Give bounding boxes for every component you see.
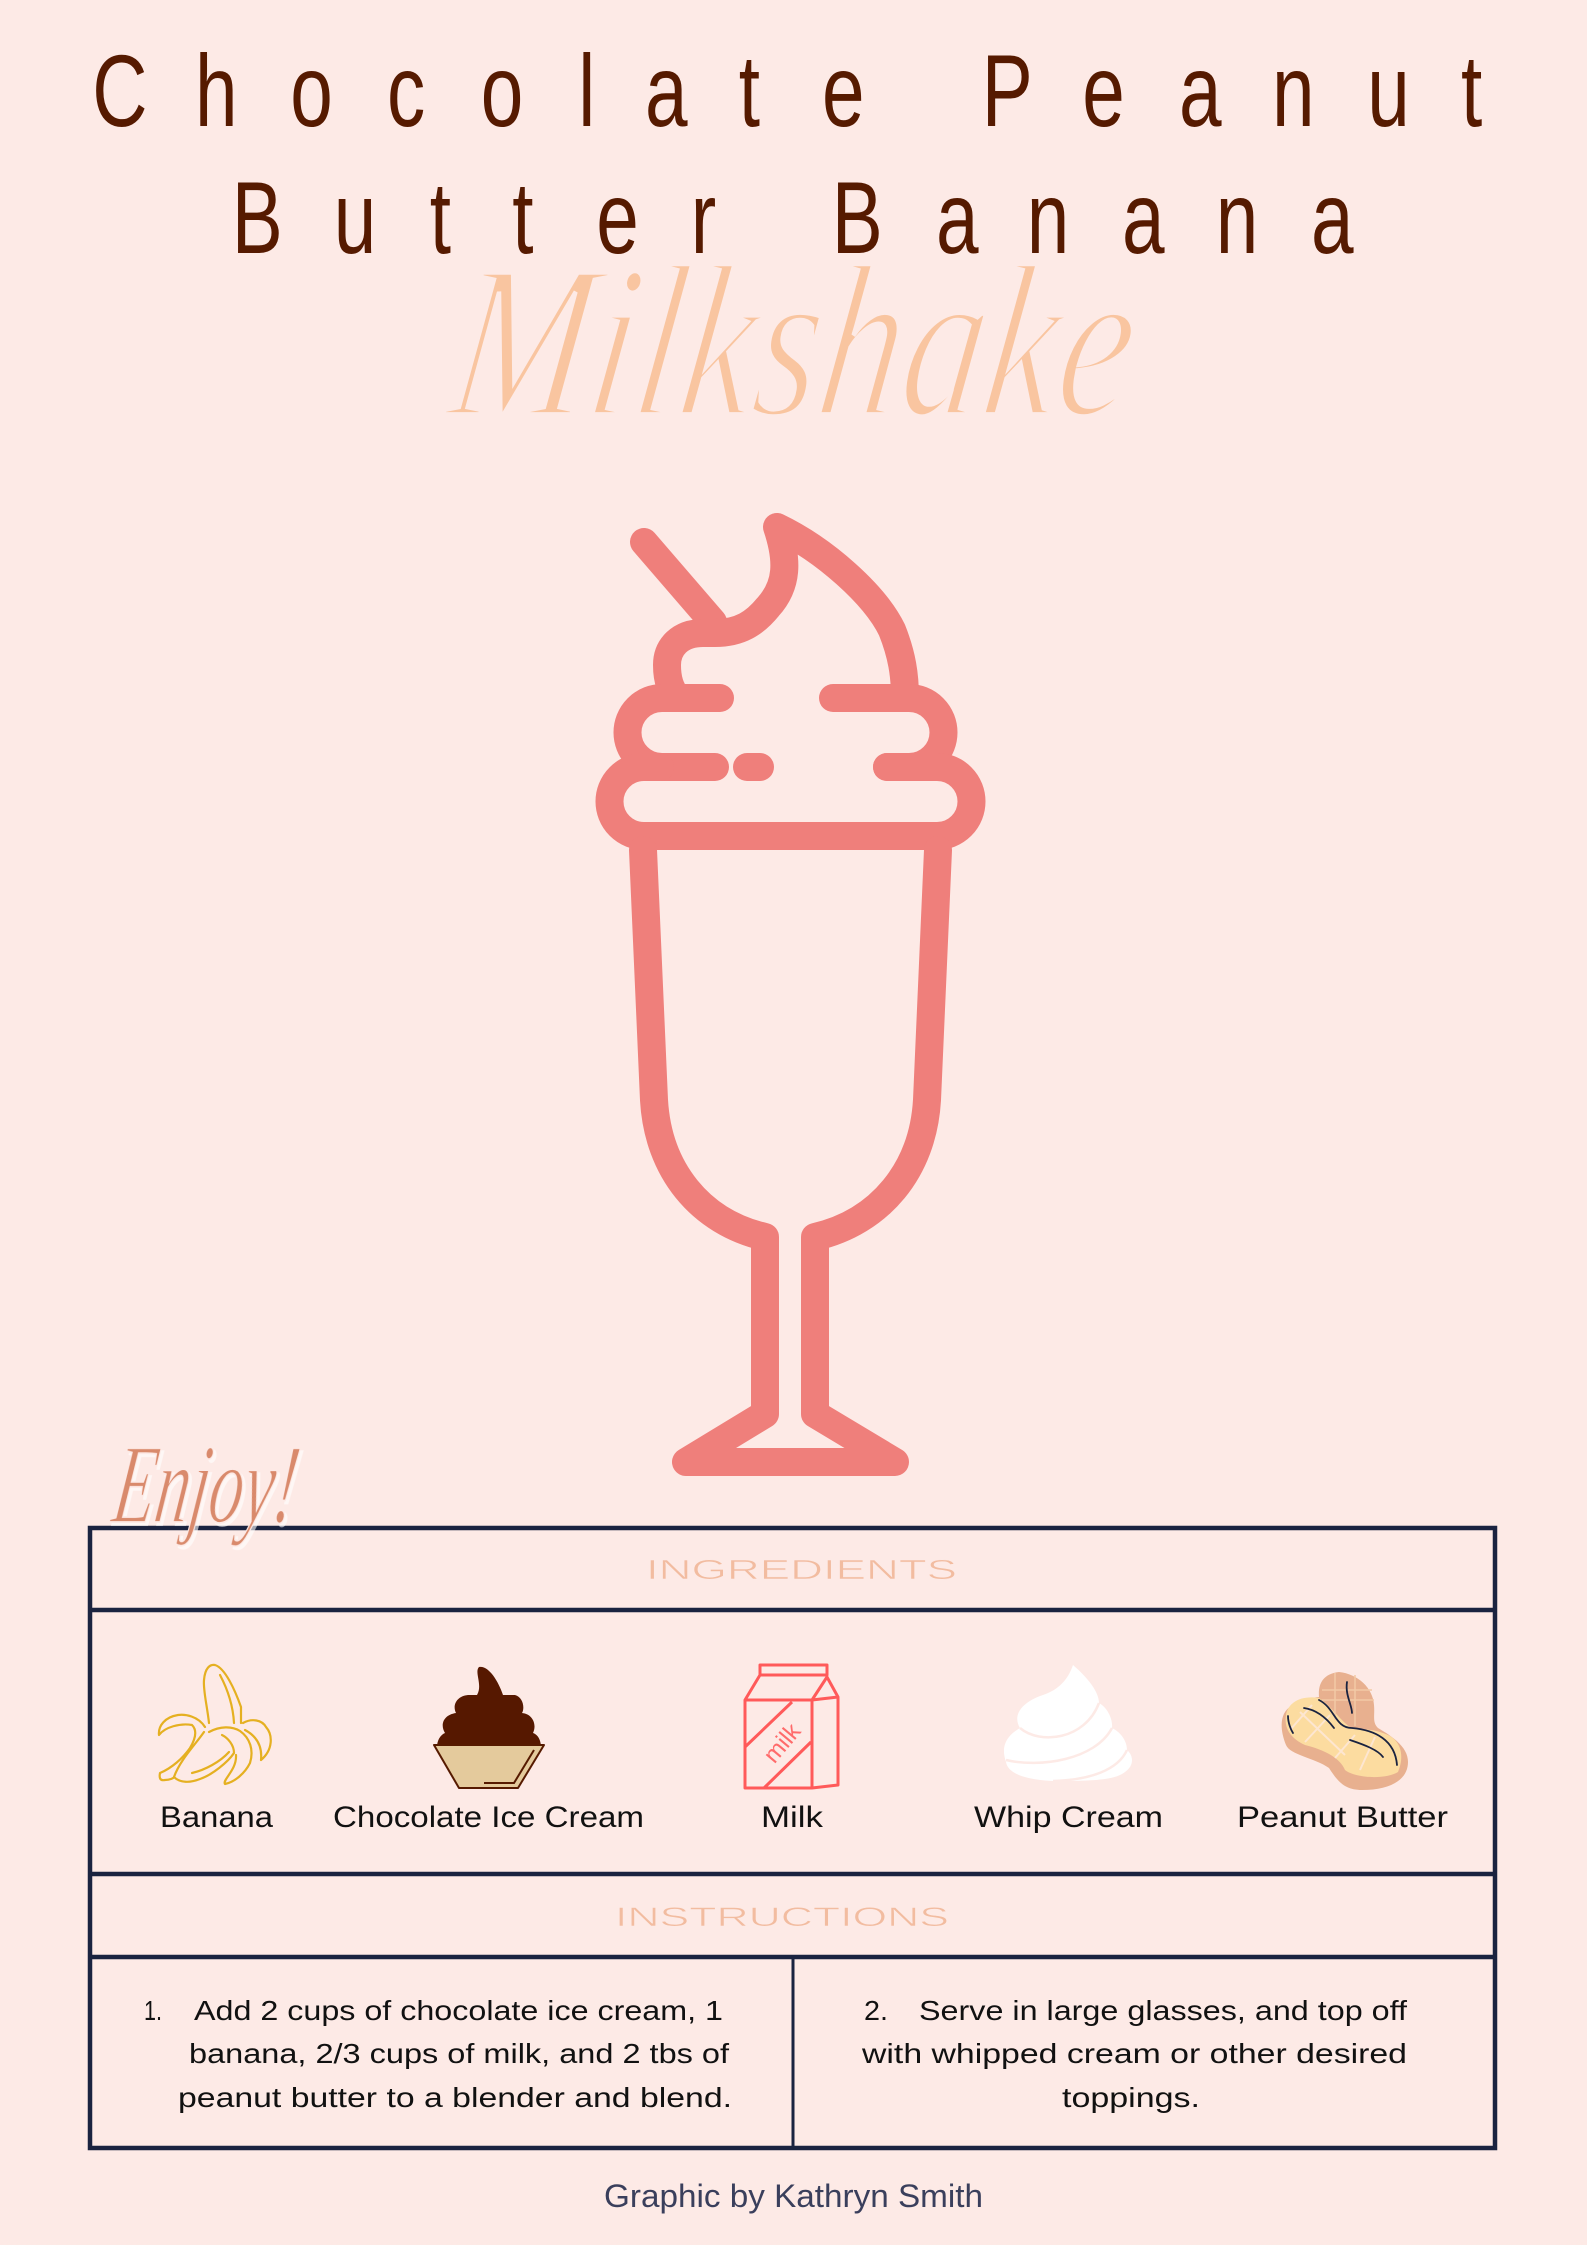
text block: instruction step 2: toppings.	[1062, 2082, 1200, 2113]
icon: peanut	[1282, 1672, 1408, 1790]
glass bowl	[643, 850, 938, 1462]
text block: instruction step 1: Add 2 cups of chocolate ice cream, 1	[194, 1995, 723, 2026]
text block: instruction step 2: Serve in large glasses, and top off	[919, 1995, 1407, 2026]
text block: instruction step 1	[144, 1995, 732, 2113]
whipped top swirl	[667, 527, 905, 698]
ingredients and instructions table	[90, 1528, 1495, 2148]
text block: instruction step 2: 2.	[864, 1995, 888, 2026]
icon: milk carton: milk	[758, 1718, 807, 1768]
cream dot	[747, 753, 760, 781]
icon: milk carton	[745, 1665, 838, 1788]
heading: instructions: INSTRUCTIONS	[615, 1902, 949, 1932]
text block: instruction step 1: peanut butter to a blender and blend.	[178, 2082, 732, 2113]
icon: milkshake glass	[610, 527, 972, 1462]
heading: ingredients: INGREDIENTS	[646, 1554, 957, 1585]
title: ButterBanana	[232, 161, 1354, 276]
text block: instruction step 1: banana, 2/3 cups of milk, and 2 tbs of	[189, 2038, 729, 2069]
icon: banana	[159, 1665, 271, 1784]
label: peanut butter: Peanut Butter	[1237, 1801, 1448, 1834]
text block: instruction step 1: 1.	[144, 1995, 162, 2026]
subtitle: Milkshake script: Milkshake	[436, 221, 1152, 463]
label: whip cream: Whip Cream	[974, 1801, 1163, 1834]
title	[92, 34, 1482, 276]
label: banana: Banana	[160, 1801, 273, 1834]
text block: instruction step 2: with whipped cream or other desired	[861, 2038, 1407, 2069]
title: ChocolatePeanut	[92, 34, 1482, 149]
label: chocolate ice cream: Chocolate Ice Cream	[333, 1801, 644, 1834]
label: milk: Milk	[761, 1801, 824, 1834]
icon: chocolate ice cream	[434, 1667, 544, 1788]
bottom cream layer	[610, 767, 972, 836]
text block: instruction step 2	[861, 1995, 1407, 2113]
icon: whipped cream	[1004, 1665, 1132, 1781]
callout: Enjoy! script: Enjoy!	[105, 1423, 307, 1547]
straw	[644, 542, 713, 622]
credit line: Graphic by Kathryn Smith	[604, 2178, 983, 2214]
middle cream layer	[628, 698, 944, 767]
